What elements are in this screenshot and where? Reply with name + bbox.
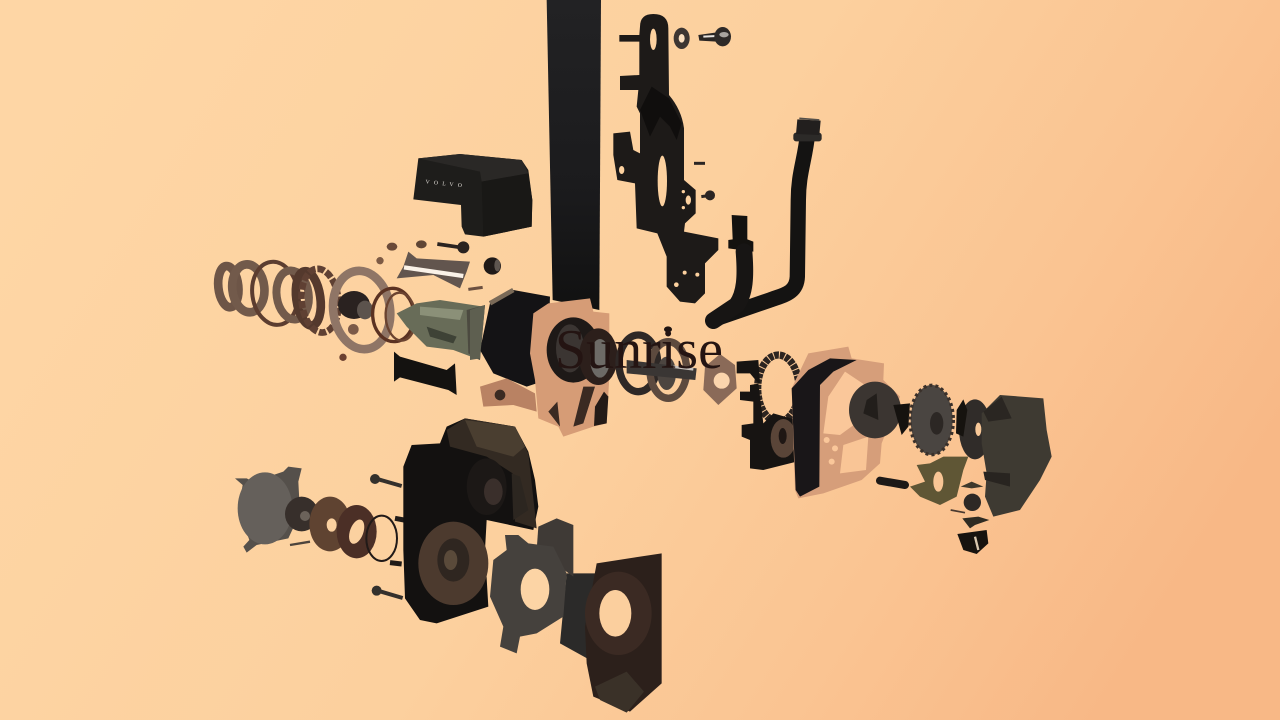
lower parts: actuator and housings (235, 418, 662, 713)
thin copper rings (371, 287, 417, 343)
separated rings on shaft (619, 335, 697, 398)
gearbox outer cover (982, 395, 1052, 517)
Volvo cover (413, 154, 532, 237)
long black pipe (717, 118, 822, 318)
dark dot (letter i) (664, 326, 672, 332)
copper gearbox plate (792, 347, 900, 498)
black motor drum (470, 290, 550, 387)
hex washer (703, 354, 737, 405)
dark brown mounting plate (585, 553, 662, 712)
main black actuator housing (403, 418, 538, 623)
top bolt (698, 27, 731, 46)
upper parts: belt, bracket and pipes (547, 0, 822, 332)
toothed belt ring (758, 355, 799, 422)
long screws (370, 474, 404, 598)
sawtooth gear (910, 385, 953, 455)
black mounting bracket (613, 14, 718, 303)
large flat ring with hub (328, 267, 395, 353)
green-grey shaft (397, 300, 485, 360)
spring ring (956, 399, 991, 459)
dark gear housing (737, 360, 797, 470)
grey flange with ears (235, 467, 302, 553)
wire clip ring (366, 516, 397, 561)
seat belt strap (547, 0, 601, 310)
pin (880, 481, 905, 485)
green bracket (910, 457, 968, 505)
copper plate (480, 298, 609, 437)
Volvo wordmark: VOLVO (425, 179, 466, 190)
right parts: gears, plate and cover (737, 347, 1052, 554)
brown housing disc (418, 522, 488, 605)
left parts: cover, rings and shaft (216, 154, 532, 395)
star washer (674, 28, 690, 49)
friction rings (216, 259, 342, 334)
short black pipe (713, 215, 753, 321)
central parts: motor, plate and rings (470, 290, 737, 437)
brown disc (309, 497, 351, 551)
small bolts and nuts (339, 240, 501, 361)
Sunrise label: Sunrise (555, 319, 723, 381)
dark ring stack (547, 317, 618, 385)
lower black bar (394, 352, 457, 395)
drum gear (849, 382, 910, 438)
grey ring flange (490, 518, 573, 653)
perforated ring (337, 505, 377, 558)
small ball joint parts (951, 482, 989, 554)
dark connector block (560, 573, 597, 660)
upper bar with white stripe (397, 252, 470, 288)
lower connector (595, 672, 644, 713)
small screws (694, 163, 715, 200)
hub gear (285, 497, 318, 545)
